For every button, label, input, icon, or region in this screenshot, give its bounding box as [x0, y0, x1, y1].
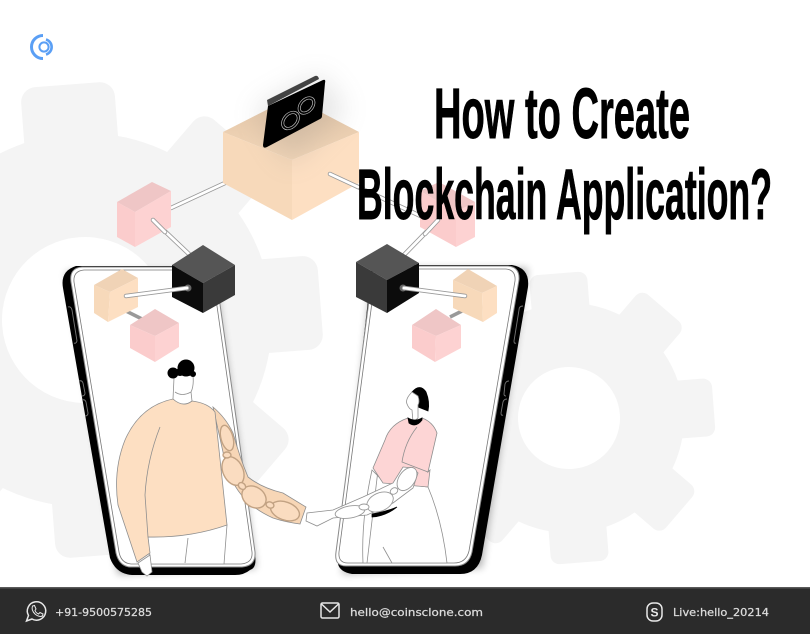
- phone shadow: [66, 270, 256, 574]
- side buttons: [501, 306, 523, 415]
- arm: [306, 467, 418, 526]
- connector stub on cube: [330, 174, 358, 187]
- left phone small cubes: [94, 269, 179, 362]
- title: [357, 75, 772, 235]
- right phone small cubes: [412, 269, 497, 362]
- peach cube: [94, 269, 138, 292]
- footer bar: [0, 587, 810, 634]
- pink cube: [412, 309, 461, 336]
- skirt: [363, 470, 447, 563]
- arm shadow: [372, 507, 397, 517]
- phone shadow: [342, 268, 528, 574]
- pink cube upper left: [117, 182, 171, 247]
- icon: skype: S: [650, 606, 659, 620]
- wallet icon: [255, 75, 345, 165]
- face and neck: [407, 392, 419, 422]
- black cube right: [356, 244, 465, 313]
- logo: [32, 36, 52, 58]
- sweater: [117, 399, 227, 562]
- right phone: [336, 265, 528, 574]
- background gears: [0, 67, 725, 574]
- gear: large left: [0, 82, 322, 558]
- contact: skype: Live:hello_20214: [673, 607, 769, 619]
- pink cube upper right: [420, 182, 475, 247]
- trousers: [148, 525, 227, 564]
- left phone: [63, 266, 256, 575]
- black cube left: [126, 245, 235, 313]
- man figure: [117, 360, 306, 576]
- phone body: [63, 266, 255, 575]
- contact: email: hello@coinsclone.com: [350, 607, 483, 619]
- network connectors: [153, 174, 440, 257]
- phone body: [338, 265, 528, 574]
- phone screen: [336, 266, 519, 566]
- neck and face: [173, 374, 193, 404]
- peach cube: [453, 269, 497, 293]
- connector: [450, 310, 464, 317]
- phone screen: [71, 267, 255, 567]
- hair: [168, 360, 196, 378]
- main peach cube: [223, 97, 359, 220]
- woman figure: [306, 388, 447, 563]
- connector: [126, 311, 142, 319]
- contact: skype: [647, 603, 769, 621]
- icon: envelope: [321, 603, 339, 618]
- side buttons: [68, 307, 88, 416]
- pink cube: [130, 309, 179, 336]
- hand: [138, 555, 152, 576]
- contact: phone: +91-9500575285: [55, 607, 152, 619]
- chain arm: [213, 407, 306, 524]
- gear: small right: [486, 272, 715, 564]
- contact: email: [321, 603, 483, 619]
- shirt: [373, 418, 437, 487]
- collar: [408, 418, 422, 425]
- hair: [412, 388, 429, 411]
- icon: whatsapp: [26, 602, 46, 621]
- contact: phone: [26, 602, 152, 621]
